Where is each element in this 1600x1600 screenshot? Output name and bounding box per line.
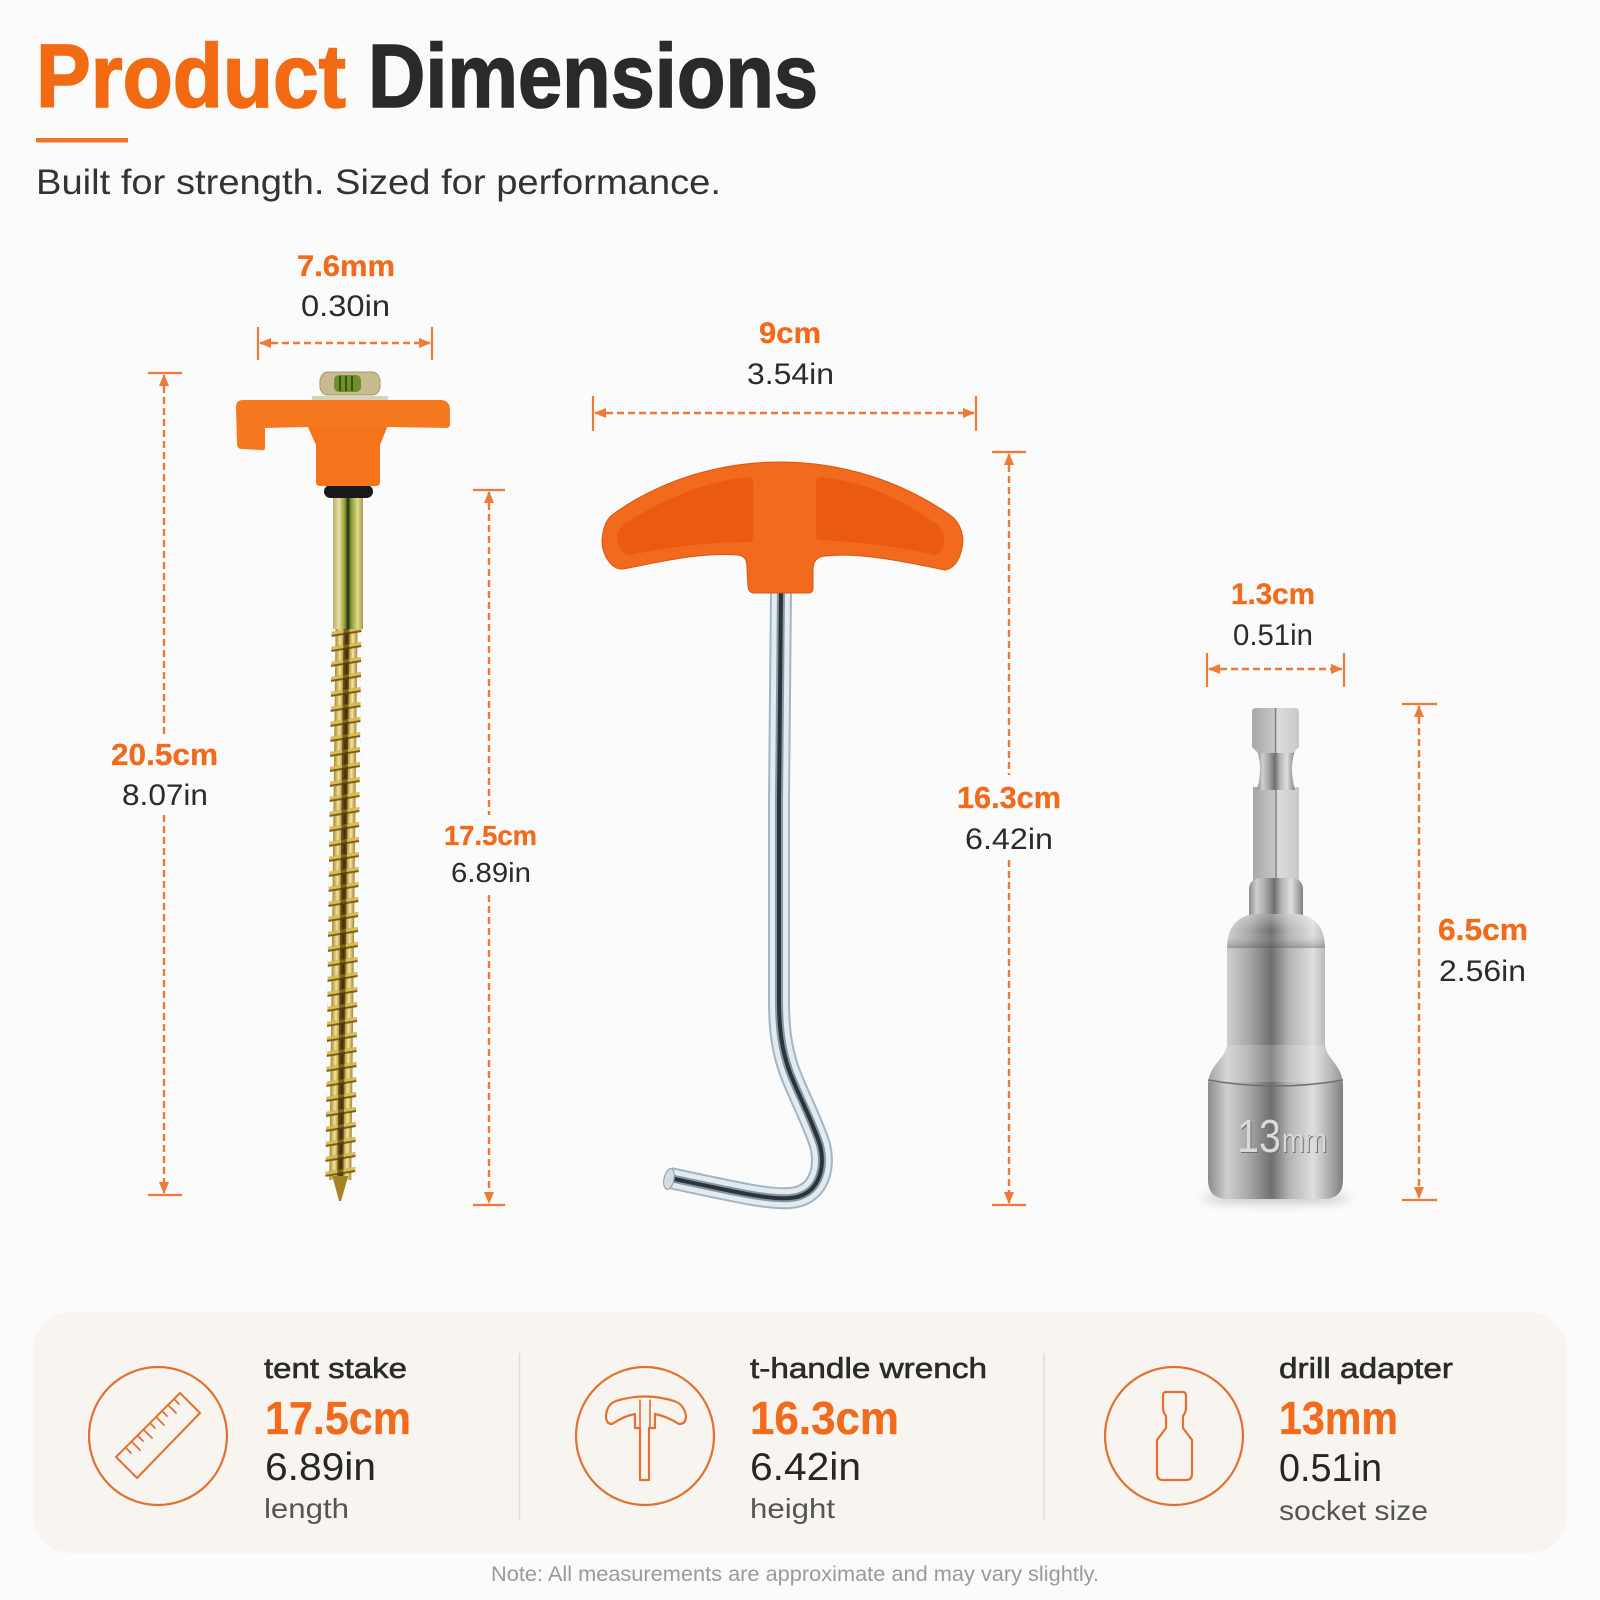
spec text: t-handle wrench: 16.3cm <box>750 1392 899 1444</box>
wrench orange handle <box>602 462 963 593</box>
dimension: wrench height 16.3cm: 6.42in <box>965 823 1053 856</box>
orange head body <box>307 425 388 486</box>
subtitle: Built for strength. Sized for performance. <box>36 163 721 202</box>
spec text: drill adapter: drill adapter <box>1279 1353 1453 1385</box>
icon: t-handle <box>576 1367 714 1505</box>
title <box>36 27 818 127</box>
embossed 13mm marking: 13 <box>1237 1110 1281 1162</box>
spec text: tent stake: tent stake <box>264 1353 407 1385</box>
hex nut <box>320 372 380 395</box>
spec text: drill adapter: 13mm <box>1279 1392 1398 1444</box>
spec text: drill adapter: 0.51in <box>1279 1447 1382 1490</box>
adapter upper hex tip <box>1252 708 1299 753</box>
product: t-handle wrench <box>602 462 963 1198</box>
adapter lower hex shank <box>1253 787 1299 882</box>
product: tent stake screw <box>236 372 450 1201</box>
dimension: adapter width 1.3cm <box>1207 578 1344 687</box>
adapter socket body <box>1208 914 1343 1199</box>
rubber o-ring <box>324 485 373 498</box>
dimension: stake head width 7.6mm <box>258 250 432 360</box>
orange head plate <box>236 400 450 450</box>
dimension: stake total length 20.5cm <box>111 373 218 1195</box>
dimension: wrench height 16.3cm: 16.3cm <box>957 780 1061 815</box>
dimension: wrench handle width 9cm: 3.54in <box>747 358 834 391</box>
spec text: tent stake: 17.5cm <box>265 1392 411 1444</box>
embossed 13mm marking <box>1237 1110 1328 1163</box>
screw threaded shaft <box>325 620 362 1201</box>
product: drill adapter socket <box>1202 708 1350 1204</box>
embossed 13mm marking: mm <box>1282 1122 1327 1160</box>
dimension: stake head width 7.6mm: 7.6mm <box>297 250 395 283</box>
embossed 13mm marking: 13 <box>1238 1111 1282 1163</box>
panel: summary specs <box>33 1312 1567 1553</box>
dimension: wrench handle width 9cm: 9cm <box>759 317 821 350</box>
spec text: tent stake <box>264 1353 411 1524</box>
dimension: adapter width 1.3cm: 1.3cm <box>1231 578 1315 611</box>
adapter neck <box>1257 750 1295 790</box>
dimension: stake shaft length 17.5cm: 6.89in <box>451 857 531 888</box>
spec text: t-handle wrench: height <box>750 1493 835 1524</box>
dimension: adapter height 6.5cm: 2.56in <box>1439 955 1526 988</box>
spec text: tent stake: 6.89in <box>265 1446 376 1489</box>
dimension: adapter width 1.3cm: 0.51in <box>1233 619 1313 652</box>
icon: ruler <box>89 1367 227 1505</box>
adapter collar <box>1249 878 1303 918</box>
dimension: stake total length 20.5cm: 8.07in <box>122 779 208 812</box>
title underline accent <box>36 138 128 142</box>
spec text: t-handle wrench <box>750 1353 987 1524</box>
screw smooth shaft <box>333 495 363 629</box>
dimension: wrench handle width 9cm <box>593 317 976 431</box>
title: Product <box>36 27 346 127</box>
dimension: adapter height 6.5cm <box>1402 704 1528 1200</box>
footnote: Note: All measurements are approximate and may vary slightly. <box>491 1563 1099 1586</box>
dimension: stake shaft length 17.5cm <box>444 490 537 1205</box>
wrench handle pockets <box>617 477 753 555</box>
spec text: t-handle wrench: 6.42in <box>750 1446 861 1489</box>
wrench steel rod <box>670 590 822 1198</box>
dimension: stake shaft length 17.5cm: 17.5cm <box>444 820 537 851</box>
spec text: t-handle wrench: t-handle wrench <box>750 1353 987 1385</box>
dimension: stake total length 20.5cm: 20.5cm <box>111 737 218 772</box>
spec text: tent stake: length <box>264 1493 349 1524</box>
icon: drill adapter <box>1105 1367 1243 1505</box>
dimension: stake head width 7.6mm: 0.30in <box>301 290 390 323</box>
embossed 13mm marking: mm <box>1283 1123 1328 1161</box>
title: Dimensions <box>368 27 818 127</box>
dimension: wrench height 16.3cm <box>957 452 1061 1205</box>
spec text: drill adapter <box>1279 1353 1453 1526</box>
spec text: drill adapter: socket size <box>1279 1495 1428 1526</box>
dimension: adapter height 6.5cm: 6.5cm <box>1438 912 1528 947</box>
